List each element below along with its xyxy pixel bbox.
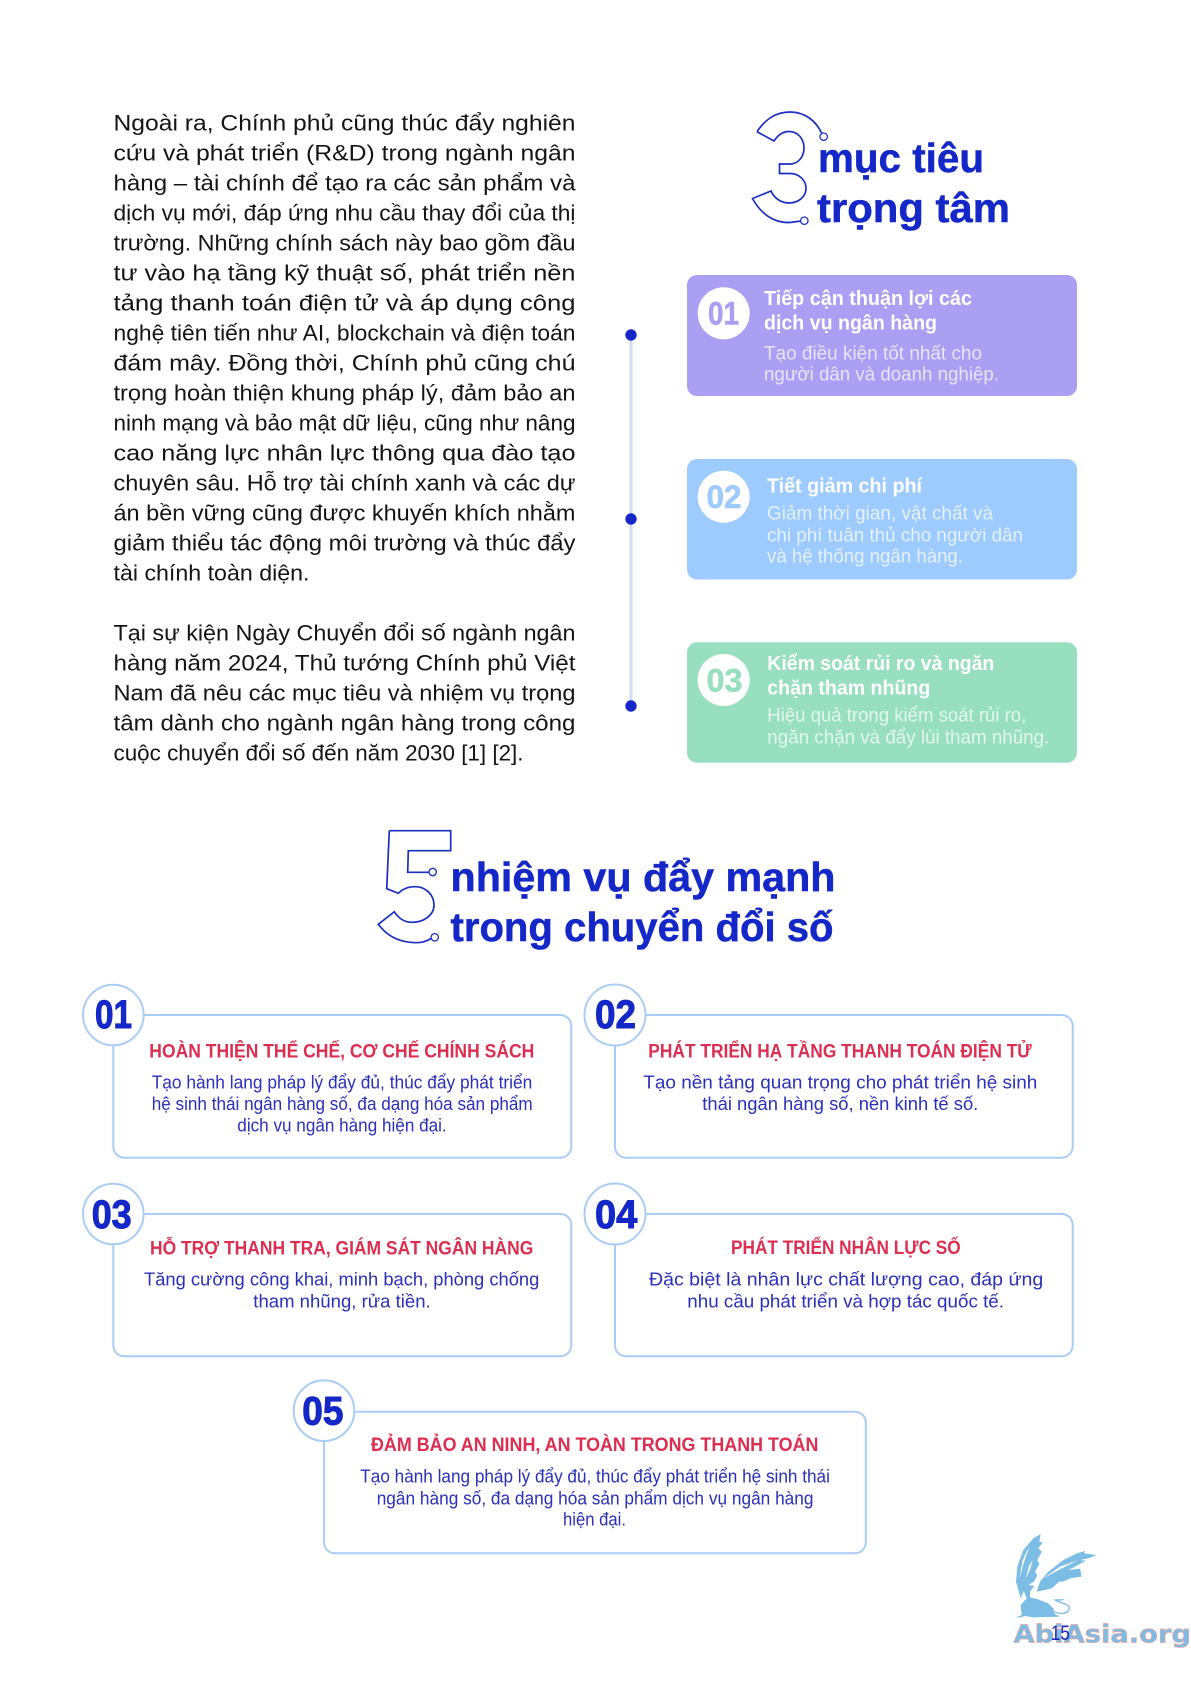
panel: task 02: thái ngân hàng số, nền kinh tế số. — [702, 1093, 978, 1114]
panel: task 04: Đặc biệt là nhân lực chất lượng cao, đáp ứng — [649, 1269, 1043, 1290]
panel: task 03 — [83, 1184, 571, 1356]
panel: task 01: dịch vụ ngân hàng hiện đại. — [237, 1115, 447, 1136]
text block: second paragraph: Nam đã nêu các mục tiêu và nhiệm vụ trọng — [114, 680, 576, 706]
text block: intro paragraph: ninh mạng và bảo mật dữ liệu, cũng như nâng — [114, 411, 576, 436]
text block: intro paragraph: hàng – tài chính để tạo ra các sản phẩm và — [114, 171, 576, 196]
panel: task 05: Tạo hành lang pháp lý đẩy đủ, thúc đẩy phát triển hệ sinh thái — [360, 1466, 830, 1487]
panel: task 04: PHÁT TRIỂN NHÂN LỰC SỐ — [731, 1237, 961, 1259]
text block: intro paragraph: tảng thanh toán điện tử và áp dụng công — [114, 291, 576, 316]
page number: 15 — [1051, 1622, 1070, 1645]
text block: second paragraph — [114, 620, 576, 766]
icon: outlined numeral 5 — [378, 831, 451, 943]
logo: griffin with site name — [1014, 1534, 1191, 1649]
panel: task 03: Tăng cường công khai, minh bạch, phòng chống — [144, 1269, 539, 1290]
text block: intro paragraph: cao năng lực nhân lực thông qua đào tạo — [114, 441, 576, 466]
panel: goal 02: và hệ thống ngân hàng. — [767, 547, 963, 568]
text block: second paragraph: tâm dành cho ngành ngân hàng trong công — [114, 710, 576, 736]
text block: intro paragraph: giảm thiểu tác động môi trường và thúc đẩy — [114, 531, 576, 556]
panel: task 05: 05 — [302, 1389, 344, 1433]
text block: intro paragraph: cứu và phát triển (R&D) trong ngành ngân — [114, 141, 576, 166]
timeline connector with three dots — [625, 329, 637, 712]
text block: intro paragraph: chuyên sâu. Hỗ trợ tài chính xanh và các dự — [114, 471, 576, 496]
panel: task 02: PHÁT TRIỂN HẠ TẦNG THANH TOÁN ĐIỆN TỬ — [648, 1040, 1032, 1062]
icon: griffin — [1016, 1534, 1097, 1617]
text block: intro paragraph — [114, 111, 576, 586]
panel: task 03: tham nhũng, rửa tiền. — [253, 1290, 431, 1311]
panel: goal 01: Tạo điều kiện tốt nhất cho — [764, 343, 982, 364]
heading: 3 muc tieu trong tam: mục tiêu — [818, 135, 984, 181]
panel: task 01: Tạo hành lang pháp lý đẩy đủ, thúc đẩy phát triển — [152, 1071, 532, 1092]
heading: 3 muc tieu trong tam: trọng tâm — [817, 185, 1010, 231]
panel: goal 01: người dân và doanh nghiệp. — [764, 365, 999, 386]
panel: goal 03 — [687, 642, 1077, 763]
text block: intro paragraph: trọng hoàn thiện khung pháp lý, đảm bảo an — [114, 381, 576, 406]
text block: second paragraph: hàng năm 2024, Thủ tướng Chính phủ Việt — [114, 650, 576, 676]
panel: goal 03: ngăn chặn và đẩy lùi tham nhũng. — [767, 727, 1049, 748]
panel: goal 01: 01 — [708, 296, 739, 332]
panel: task 05: hiện đại. — [563, 1509, 626, 1530]
panel: task 03: 03 — [92, 1193, 132, 1237]
panel: goal 01: dịch vụ ngân hàng — [764, 312, 937, 334]
panel: goal 03: 03 — [706, 662, 742, 698]
panel: goal 03: Hiệu quả trong kiểm soát rủi ro, — [767, 706, 1026, 727]
panel: task 02: 02 — [595, 993, 636, 1037]
text block: intro paragraph: tài chính toàn diện. — [114, 561, 310, 586]
panel: goal 02: Giảm thời gian, vật chất và — [767, 503, 993, 524]
text block: intro paragraph: Ngoài ra, Chính phủ cũng thúc đẩy nghiên — [114, 111, 576, 136]
heading: 5 nhiem vu: trong chuyển đổi số — [450, 904, 834, 950]
panel: goal 03: Kiểm soát rủi ro và ngăn — [767, 653, 994, 675]
panel: task 03: HỖ TRỢ THANH TRA, GIÁM SÁT NGÂN HÀNG — [150, 1237, 533, 1259]
panel: task 02: Tạo nền tảng quan trọng cho phát triển hệ sinh — [643, 1071, 1037, 1092]
text block: intro paragraph: án bền vững cũng được khuyến khích nhằm — [114, 501, 576, 526]
panel: goal 02: 02 — [706, 479, 742, 515]
text block: intro paragraph: trường. Những chính sách này bao gồm đầu — [114, 231, 576, 256]
panel: task 01: 01 — [95, 993, 132, 1037]
panel: task 05: ngân hàng số, đa dạng hóa sản phẩm dịch vụ ngân hàng — [377, 1487, 814, 1508]
heading: 3 muc tieu trong tam — [752, 112, 1010, 231]
panel: task 04 — [584, 1184, 1073, 1356]
panel: goal 03: chặn tham nhũng — [767, 677, 930, 699]
logo: griffin with site name: AbiAsia.org — [1014, 1620, 1191, 1649]
text block: intro paragraph: nghệ tiên tiến như AI, blockchain và điện toán — [114, 321, 576, 346]
heading: 5 nhiem vu — [378, 831, 836, 950]
panel: goal 02: Tiết giảm chi phí — [767, 476, 923, 498]
panel: goal 02 — [687, 459, 1077, 580]
panel: task 04: nhu cầu phát triển và hợp tác quốc tế. — [687, 1290, 1004, 1311]
icon: outlined numeral 3 — [752, 112, 827, 224]
text block: intro paragraph: tư vào hạ tầng kỹ thuật số, phát triển nền — [114, 261, 576, 286]
panel: task 01: HOÀN THIỆN THỂ CHẾ, CƠ CHẾ CHÍNH SÁCH — [149, 1040, 534, 1062]
panel: goal 01 — [687, 275, 1077, 396]
text block: intro paragraph: dịch vụ mới, đáp ứng nhu cầu thay đổi của thị — [114, 201, 576, 226]
panel: goal 02: chi phí tuân thủ cho người dân — [767, 526, 1023, 547]
panel: task 05 — [294, 1380, 866, 1553]
panel: task 05: ĐẢM BẢO AN NINH, AN TOÀN TRONG THANH TOÁN — [371, 1434, 818, 1456]
panel: task 02 — [584, 984, 1073, 1158]
heading: 5 nhiem vu: nhiệm vụ đẩy mạnh — [450, 854, 836, 900]
text block: intro paragraph: đám mây. Đồng thời, Chính phủ cũng chú — [114, 351, 576, 376]
text block: second paragraph: cuộc chuyển đổi số đến năm 2030 [1] [2]. — [114, 740, 524, 766]
panel: task 01 — [83, 985, 571, 1158]
panel: task 01: hệ sinh thái ngân hàng số, đa dạng hóa sản phẩm — [152, 1093, 533, 1114]
panel: task 04: 04 — [595, 1193, 638, 1237]
text block: second paragraph: Tại sự kiện Ngày Chuyển đổi số ngành ngân — [114, 620, 576, 646]
panel: goal 01: Tiếp cận thuận lợi các — [764, 288, 972, 310]
